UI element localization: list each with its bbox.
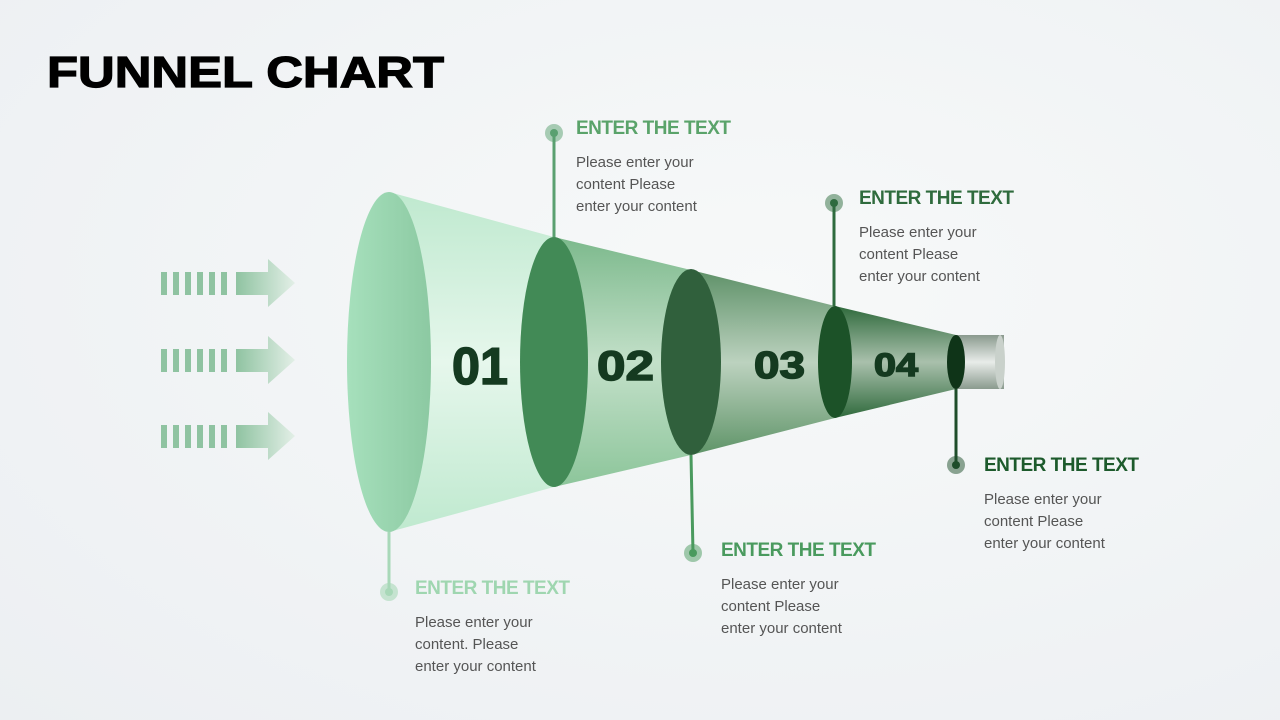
callout: top 1 [545,118,731,237]
callout: top 2: Please enter your [859,224,977,241]
funnel: 02 [597,342,654,389]
funnel: 03 [754,345,805,387]
input arrows [161,259,295,460]
funnel: 01 [452,338,508,396]
callout: top 1: Please enter your [576,154,694,171]
callout: bottom 2 [684,455,876,637]
callout: bottom 1: content. Please [415,636,518,653]
callout: bottom 1: ENTER THE TEXT [415,578,570,599]
callout: bottom 3 [947,389,1139,552]
callout: bottom 3: ENTER THE TEXT [984,455,1139,476]
callout: bottom 1 [380,532,570,675]
callout: top 1: content Please [576,176,675,193]
callout: bottom 3: enter your content [984,535,1106,552]
callout: bottom 3: content Please [984,513,1083,530]
callout: top 1: ENTER THE TEXT [576,118,731,139]
callout: top 2: enter your content [859,268,981,285]
callout: bottom 2: content Please [721,598,820,615]
callout: bottom 2: Please enter your [721,576,839,593]
callout: top 1: enter your content [576,198,698,215]
callout: top 2 [825,188,1014,306]
callout: top 2: ENTER THE TEXT [859,188,1014,209]
callout: bottom 1: enter your content [415,658,537,675]
callout: bottom 1: Please enter your [415,614,533,631]
callout: top 2: content Please [859,246,958,263]
funnel: 04 [874,347,918,383]
callout: bottom 3: Please enter your [984,491,1102,508]
title: FUNNEL CHART [47,48,444,97]
callout: bottom 2: enter your content [721,620,843,637]
funnel [347,192,1005,532]
callout: bottom 2: ENTER THE TEXT [721,540,876,561]
